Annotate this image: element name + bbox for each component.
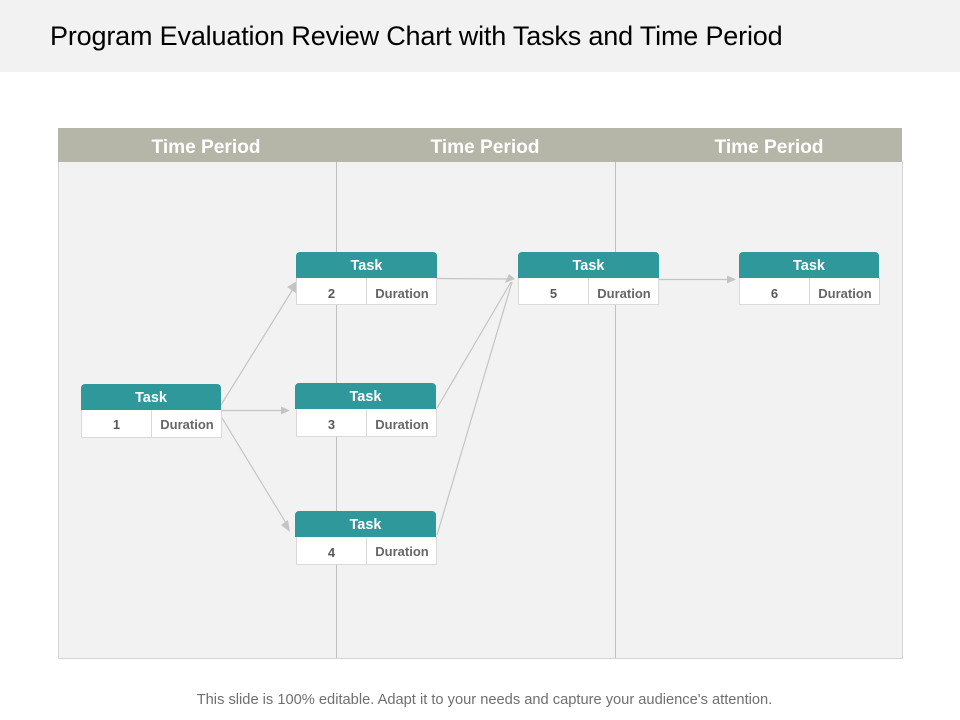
footer note: This slide is 100% editable. Adapt it to your needs and capture your audience's attention. <box>197 692 772 708</box>
divider: column 1 and 2 <box>336 162 337 658</box>
title band <box>0 0 960 72</box>
panel: chart background <box>58 162 903 659</box>
task 3: 3 <box>328 417 335 432</box>
task 3: Duration <box>375 417 429 432</box>
header bar: time periods <box>58 128 902 162</box>
task 4: Duration <box>375 544 429 559</box>
task 3 <box>295 383 437 437</box>
task 6 <box>739 252 880 305</box>
title: Program Evaluation Review Chart with Tasks and Time Period <box>50 21 782 51</box>
task 5: Duration <box>597 286 651 301</box>
task 6: Task <box>793 258 825 274</box>
task 4: 4 <box>328 545 335 560</box>
task 3: Task <box>350 389 381 405</box>
task 5 <box>518 252 659 305</box>
task 6: Duration <box>818 286 872 301</box>
task 1: Task <box>135 390 167 406</box>
task 1 <box>81 384 222 438</box>
task 4: Task <box>350 517 381 533</box>
task 4 <box>295 511 437 565</box>
task 2: Duration <box>375 286 429 301</box>
heading: time period 3: Time Period <box>715 137 823 158</box>
task 5: Task <box>572 258 604 274</box>
task 1: Duration <box>160 417 214 432</box>
heading: time period 1: Time Period <box>152 137 260 158</box>
task 2: 2 <box>328 286 335 301</box>
task 1: 1 <box>113 417 120 432</box>
task 2: Task <box>350 258 382 274</box>
divider: column 2 and 3 <box>615 162 616 658</box>
task 2 <box>296 252 437 305</box>
task 5: 5 <box>550 286 557 301</box>
task 6: 6 <box>771 286 778 301</box>
heading: time period 2: Time Period <box>431 137 539 158</box>
